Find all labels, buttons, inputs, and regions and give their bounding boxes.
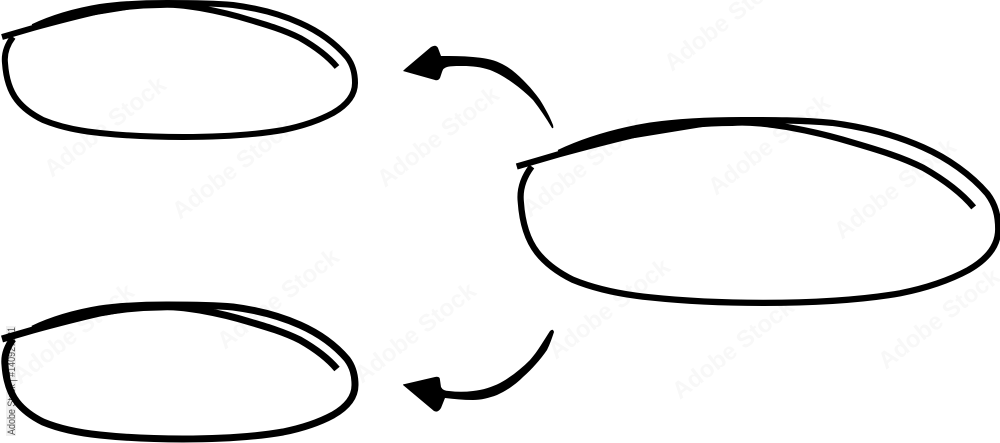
side credit text: Adobe Stock | #140927381 <box>6 327 18 435</box>
watermark: Adobe Stock <box>543 253 676 365</box>
ellipse: right large <box>517 120 998 303</box>
arrow: right ellipse to bottom left ellipse <box>403 330 554 412</box>
ellipse: top left <box>2 3 355 137</box>
watermark: Adobe Stock <box>349 277 482 389</box>
watermark: Adobe Stock <box>517 111 650 223</box>
watermark: Adobe Stock <box>39 71 172 183</box>
watermark: Adobe Stock <box>829 133 962 245</box>
watermark: Adobe Stock <box>7 278 140 390</box>
watermark: Adobe Stock <box>372 81 505 193</box>
arrow: right ellipse to top left ellipse <box>403 46 553 128</box>
watermark: Adobe Stock <box>703 89 836 201</box>
watermark: Adobe Stock <box>667 293 800 405</box>
ellipse: bottom left <box>2 305 355 439</box>
watermark: Adobe Stock <box>167 113 300 225</box>
watermark: Adobe Stock <box>212 243 345 355</box>
